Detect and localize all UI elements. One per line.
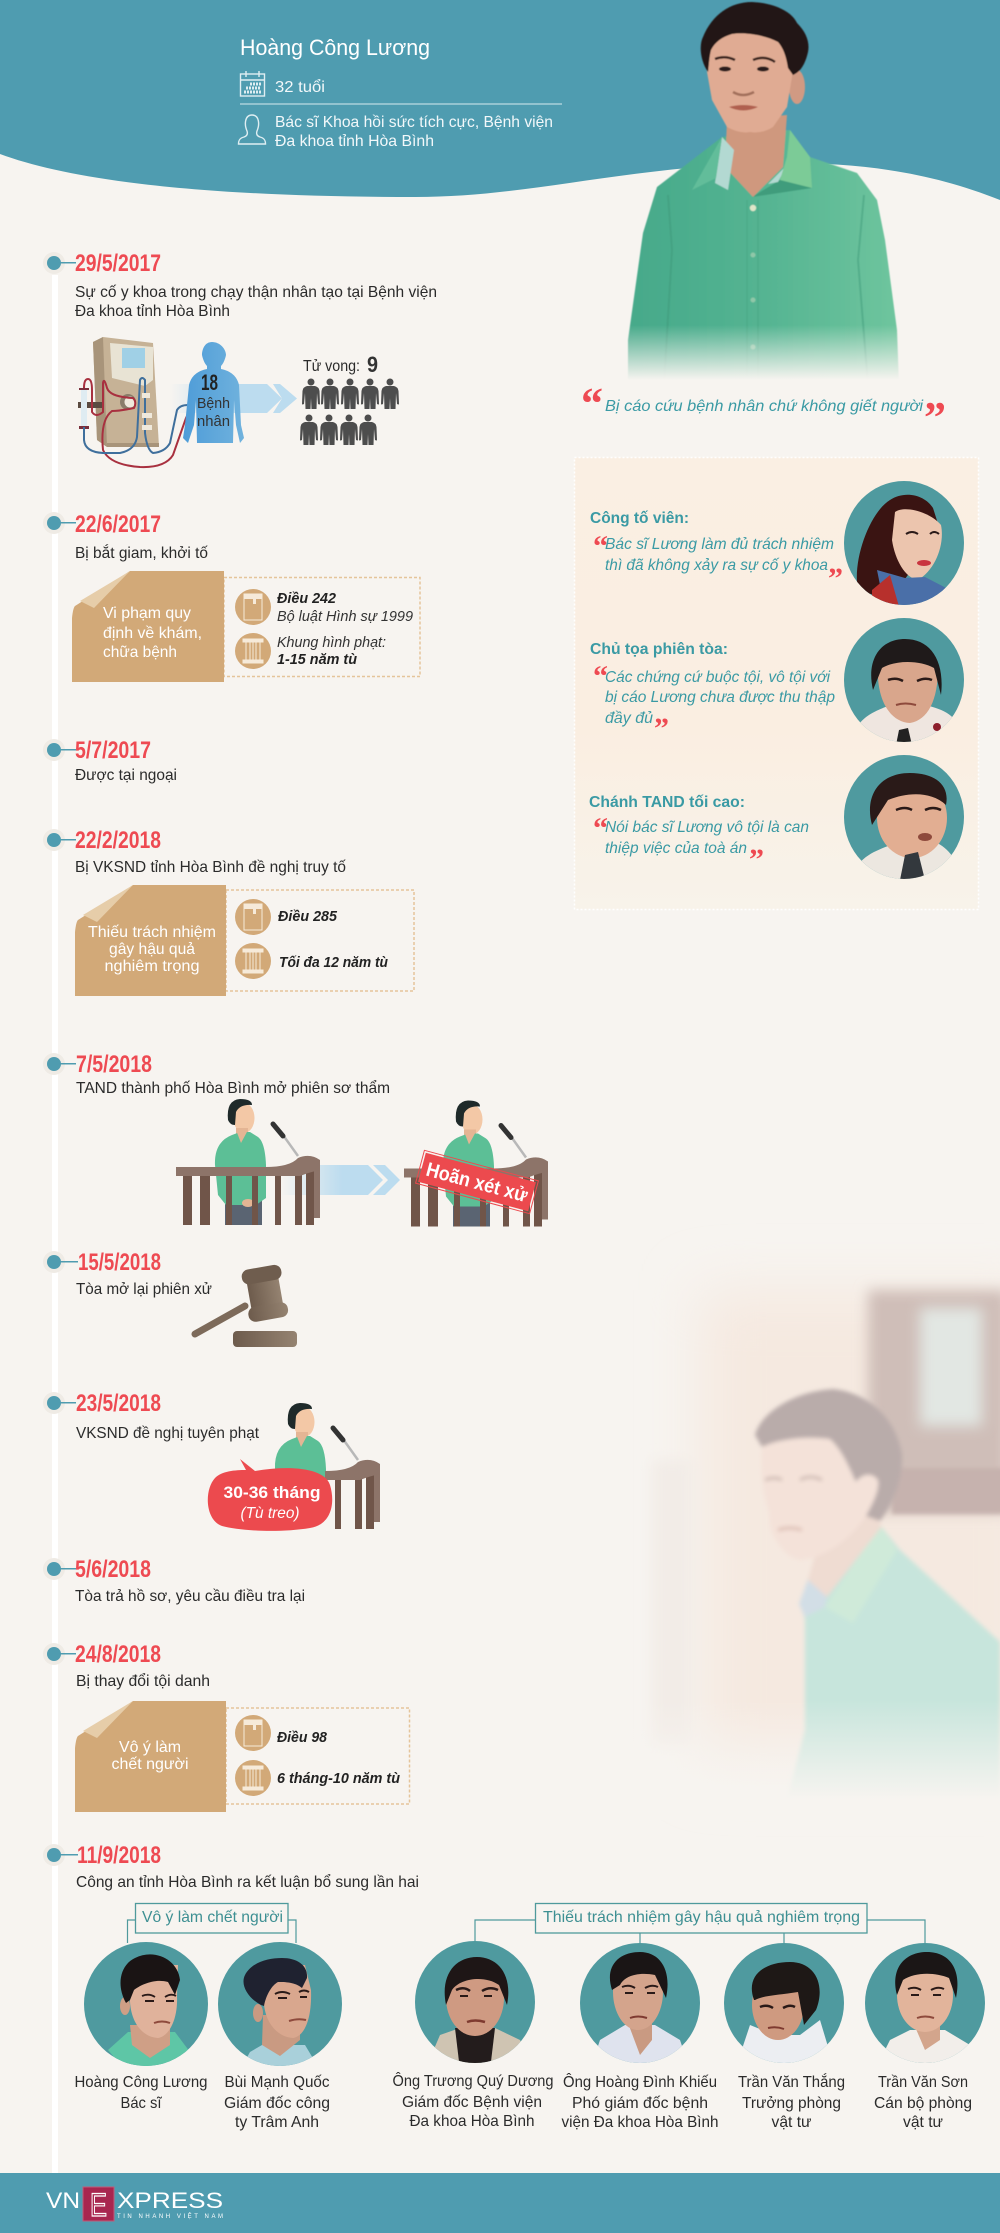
name and role: viện Đa khoa Hòa Bình	[562, 2114, 718, 2131]
speaker: presiding judge: Chủ tọa phiên tòa:	[590, 641, 728, 658]
event: 23/5/2018: VKSND đề nghị tuyên phạt	[76, 1425, 260, 1442]
portrait: presiding judge	[844, 618, 964, 742]
name and role: Giám đốc công	[224, 2095, 330, 2112]
event: 22/6/2017: 22/6/2017	[75, 511, 161, 538]
charge name: nghiêm trọng	[104, 958, 200, 975]
charge name: chết người	[112, 1756, 188, 1773]
timeline spine	[52, 275, 58, 2173]
penalty: Khung hình phạt:	[277, 634, 386, 651]
person: Bùi Mạnh Quốc	[215, 1940, 345, 2131]
icon: person	[238, 115, 266, 144]
quote: presiding judge: đầy đủ	[605, 710, 653, 727]
name and role	[224, 2074, 330, 2131]
icon: patient silhouette	[183, 342, 244, 443]
deaths label: Tử vong:	[303, 358, 360, 375]
name and role: Ông Trương Quý Dương	[392, 2071, 554, 2090]
stamp: adjourned: Hoãn xét xử	[424, 1159, 530, 1207]
quote: presiding judge: “	[593, 660, 608, 693]
event: 22/2/2018: 22/2/2018	[75, 827, 161, 854]
event: 22/6/2017	[43, 511, 208, 562]
name and role	[392, 2071, 554, 2130]
age: 32 tuổi	[275, 78, 325, 96]
icon: prison bars	[235, 943, 271, 979]
charge name: chữa bệnh	[103, 644, 177, 661]
name and role: Giám đốc Bệnh viện	[402, 2094, 542, 2111]
event: 23/5/2018: 23/5/2018	[76, 1390, 161, 1417]
logo: VnExpress	[46, 2187, 223, 2223]
icon: nine people	[300, 378, 399, 445]
name and role: Phó giám đốc bệnh	[572, 2095, 708, 2112]
header profile text: Đa khoa tỉnh Hòa Bình	[275, 133, 434, 150]
event: 5/7/2017: 5/7/2017	[75, 737, 151, 764]
name and role: Ông Hoàng Đình Khiếu	[563, 2072, 717, 2091]
arrow	[170, 384, 297, 413]
icon: law document	[235, 899, 271, 935]
illustration: defendant at the stand	[176, 1099, 320, 1225]
event: 11/9/2018	[43, 1842, 419, 1891]
person: Trần Văn Thắng	[720, 1940, 850, 2131]
icon: dialysis machine	[78, 337, 191, 467]
event: 5/7/2017: Được tại ngoại	[75, 767, 177, 784]
quote: prosecutor: Bác sĩ Lương làm đủ trách nhiệm	[605, 536, 834, 553]
article: Điều 285	[278, 908, 338, 925]
event: 22/2/2018	[43, 827, 346, 876]
quote: chief justice: thiệp việc của toà án	[605, 840, 747, 857]
event: 5/6/2018	[43, 1556, 305, 1605]
event: 22/6/2017: Bị bắt giam, khởi tố	[75, 543, 208, 562]
footer band	[0, 2173, 1000, 2233]
quote: prosecutor: “	[593, 530, 608, 563]
header wave	[0, 0, 1000, 200]
portrait	[215, 1940, 345, 2070]
charge name: Vi phạm quy	[103, 605, 191, 622]
illustration: dialysis machine and patient: 9	[367, 352, 378, 377]
event: 11/9/2018: 11/9/2018	[77, 1842, 161, 1869]
name and role: Trần Văn Sơn	[878, 2074, 968, 2091]
illustration: dialysis machine and patient: Bệnh	[197, 395, 230, 412]
icon: gavel	[195, 1264, 297, 1347]
event: 11/9/2018: Công an tỉnh Hòa Bình ra kết luận bổ sung lần hai	[76, 1873, 419, 1891]
event: 15/5/2018: 15/5/2018	[78, 1249, 161, 1276]
group: negligence: Thiếu trách nhiệm gây hậu quả nghiêm trọng	[543, 1909, 860, 1926]
charge card: Điều 242: Bộ luật Hình sự 1999	[277, 608, 414, 625]
person: Trần Văn Sơn	[860, 1940, 990, 2131]
logo: VnExpress: E	[90, 2187, 107, 2223]
charge name	[88, 924, 216, 975]
portrait: prosecutor	[844, 481, 964, 605]
portrait	[865, 1943, 985, 2063]
event: 7/5/2018	[43, 1051, 390, 1097]
charge name: gây hậu quả	[109, 941, 195, 958]
charge card: Điều 285	[75, 885, 414, 996]
event: 24/8/2018: 24/8/2018	[75, 1641, 161, 1668]
event: 7/5/2018: TAND thành phố Hòa Bình mở phiên sơ thẩm	[76, 1079, 390, 1097]
name and role: Trần Văn Thắng	[738, 2072, 845, 2091]
portrait	[80, 1940, 210, 2070]
quote: presiding judge: ”	[654, 712, 669, 745]
name and role: Bùi Mạnh Quốc	[224, 2074, 330, 2091]
speech bubble: 30-36 tháng	[224, 1483, 320, 1502]
name and role: Trưởng phòng	[742, 2095, 841, 2112]
illustration: dialysis machine and patient	[78, 337, 399, 467]
arrow: court adjourned	[281, 1165, 400, 1195]
group: manslaughter	[128, 1904, 296, 1943]
name and role: vật tư	[903, 2114, 943, 2131]
event: 29/5/2017	[43, 250, 437, 320]
event: 24/8/2018: Bị thay đổi tội danh	[76, 1672, 210, 1690]
illustration: dialysis machine and patient: nhân	[197, 413, 230, 430]
quote: prosecutor	[593, 530, 843, 595]
penalty: 6 tháng-10 năm tù	[277, 1770, 400, 1787]
event: 29/5/2017: Sự cố y khoa trong chạy thận nhân tạo tại Bệnh viện	[75, 284, 437, 301]
event: 22/2/2018: Bị VKSND tỉnh Hòa Bình đề nghị truy tố	[75, 859, 346, 876]
penalty: Tối đa 12 năm tù	[279, 954, 388, 971]
charge name: Vô ý làm	[119, 1739, 181, 1756]
event: 5/6/2018: Tòa trả hồ sơ, yêu cầu điều tra lại	[75, 1588, 305, 1605]
quote: presiding judge: Các chứng cứ buộc tội, vô tội với	[605, 669, 830, 686]
portrait	[724, 1943, 844, 2063]
quote: presiding judge	[593, 660, 835, 745]
article: Điều 242	[277, 590, 337, 607]
charge name: Thiếu trách nhiệm	[88, 924, 216, 941]
event: 5/6/2018: 5/6/2018	[75, 1556, 151, 1583]
quote text: Bị cáo cứu bệnh nhân chứ không giết người	[605, 398, 923, 415]
quote: prosecutor: ”	[828, 562, 843, 595]
speech bubble: (Tù treo)	[240, 1505, 300, 1522]
quote: chief justice: Nói bác sĩ Lương vô tội là can	[605, 819, 809, 836]
logo: VnExpress: TIN NHANH VIỆT NAM	[117, 2212, 223, 2220]
icon: law document	[235, 1715, 271, 1751]
name and role	[74, 2074, 208, 2112]
charge name	[103, 605, 202, 661]
header profile text	[238, 35, 562, 150]
logo: VnExpress: VN	[46, 2188, 80, 2213]
speaker: prosecutor: Công tố viên:	[590, 510, 689, 527]
event: 15/5/2018: Tòa mở lại phiên xử	[76, 1281, 212, 1298]
article: Điều 98	[277, 1729, 328, 1746]
event: 5/7/2017	[43, 737, 177, 784]
job: Bác sĩ Khoa hồi sức tích cực, Bệnh viện	[275, 114, 553, 131]
opening quote mark: “	[581, 379, 603, 428]
speech bubble	[208, 1459, 332, 1531]
event: 23/5/2018	[43, 1390, 260, 1442]
closing quote mark: ”	[924, 393, 946, 442]
icon: calendar	[240, 71, 265, 96]
portrait	[580, 1943, 700, 2063]
person: Hoàng Đình Khiếu	[562, 1940, 718, 2131]
quote: prosecutor: thì đã không xảy ra sự cố y khoa	[605, 557, 828, 574]
charge card: Điều 98	[75, 1701, 410, 1812]
charge card: Điều 242	[72, 571, 420, 682]
name and role: Đa khoa Hòa Bình	[410, 2113, 534, 2130]
icon: prison bars	[235, 1760, 271, 1796]
logo: VnExpress: XPRESS	[117, 2188, 223, 2213]
charge card: Điều 242: 1-15 năm tù	[277, 651, 357, 668]
event: 29/5/2017: 29/5/2017	[75, 250, 161, 277]
portrait: chief justice	[844, 755, 964, 879]
faded background photo of defendant	[600, 1290, 1000, 1820]
quote: chief justice: ”	[749, 843, 764, 876]
name: Hoàng Công Lương	[240, 35, 430, 60]
group: manslaughter: Vô ý làm chết người	[142, 1909, 283, 1926]
quote: chief justice: “	[593, 812, 608, 845]
illustration: adjourned hearing	[404, 1100, 548, 1226]
group: negligence	[475, 1904, 925, 1943]
quote: presiding judge: bị cáo Lương chưa được thu thập	[605, 689, 835, 706]
name and role: Bác sĩ	[120, 2095, 163, 2112]
person: Hoàng Công Lương	[74, 1940, 210, 2112]
charge name	[112, 1739, 188, 1773]
event: 7/5/2018: 7/5/2018	[76, 1051, 152, 1078]
event: 29/5/2017: Đa khoa tỉnh Hòa Bình	[75, 303, 230, 320]
event: 24/8/2018	[43, 1641, 210, 1690]
name and role	[738, 2072, 845, 2131]
panel: court quotes	[574, 458, 978, 910]
patient count: 18	[201, 370, 218, 395]
event: 15/5/2018	[43, 1249, 212, 1298]
name and role: vật tư	[772, 2114, 812, 2131]
photo: Hoàng Công Lương	[600, 2, 930, 386]
name and role: Cán bộ phòng	[874, 2095, 972, 2112]
name and role: Hoàng Công Lương	[74, 2074, 208, 2091]
name and role: ty Trâm Anh	[235, 2114, 319, 2131]
person: Trương Quý Dương	[392, 1940, 554, 2130]
portrait	[415, 1941, 535, 2063]
speaker: chief justice: Chánh TAND tối cao:	[589, 794, 745, 811]
icon: prison bars	[235, 633, 271, 669]
headline quote	[581, 379, 946, 442]
icon: law document	[235, 589, 271, 625]
charge name: định về khám,	[103, 625, 202, 642]
name and role	[562, 2072, 718, 2131]
quote: chief justice	[593, 812, 809, 876]
illustration: sentence request	[208, 1403, 380, 1531]
name and role	[874, 2074, 972, 2131]
